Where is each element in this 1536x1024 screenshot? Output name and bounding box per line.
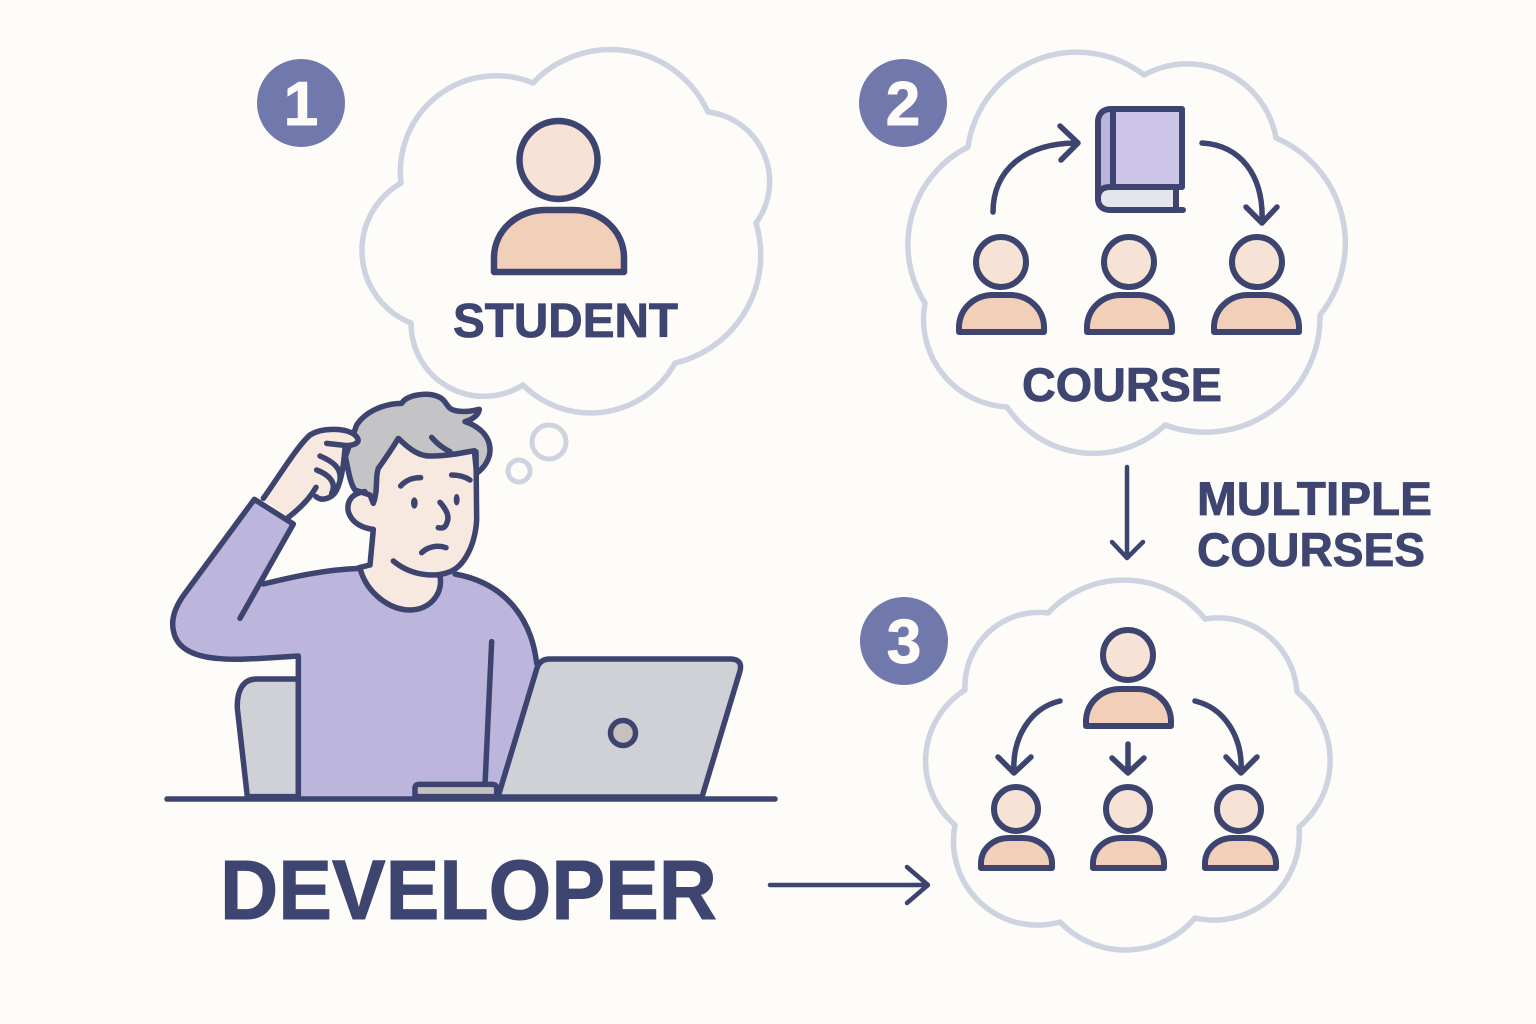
cloud outline: multiple courses	[926, 580, 1330, 950]
label: multiple courses: COURSES	[1197, 523, 1425, 576]
badge: step 1	[257, 59, 345, 147]
person	[173, 394, 537, 797]
arrow: course down to multiple courses	[1112, 467, 1143, 558]
arrow: developer to courses	[770, 867, 928, 903]
badge: step 1: 1	[284, 70, 318, 139]
cloud outline: course	[908, 52, 1345, 453]
arrow: students to book	[993, 126, 1078, 212]
label: multiple courses	[1197, 472, 1432, 576]
badge: step 2	[859, 59, 947, 147]
laptop	[498, 659, 741, 797]
tablet on desk	[415, 784, 497, 797]
hand	[263, 429, 358, 517]
brows, nose, mouth	[401, 475, 470, 553]
icon: small thought bubbles	[508, 425, 566, 482]
ear	[348, 492, 373, 568]
arrows: distribution to three people	[998, 701, 1257, 773]
sweater outline	[173, 499, 537, 797]
badge: step 3	[860, 597, 948, 685]
cloud outline: student	[362, 50, 770, 413]
label: course: COURSE	[1022, 358, 1222, 411]
chair	[237, 679, 298, 797]
desk line	[167, 796, 775, 802]
illustration: confused developer at laptop	[167, 394, 775, 799]
icon: book	[1098, 109, 1183, 210]
label: developer: DEVELOPER	[220, 843, 717, 937]
jaw	[393, 452, 477, 575]
panel: multiple courses thought cloud	[926, 580, 1330, 950]
sweater	[173, 499, 537, 797]
icon: three people	[981, 787, 1276, 868]
icon: three students	[959, 237, 1299, 332]
panel: student thought cloud	[362, 50, 770, 413]
panel: course thought cloud	[908, 52, 1345, 453]
arrow: book to students	[1202, 143, 1277, 223]
skin: face and neck	[348, 438, 477, 608]
badge: step 2: 2	[886, 70, 920, 139]
label: student: STUDENT	[453, 295, 678, 348]
icon: teacher person	[1086, 630, 1171, 726]
icon: student person	[494, 121, 624, 272]
eyes	[412, 498, 417, 508]
hair	[345, 394, 490, 503]
label: multiple courses: MULTIPLE	[1197, 472, 1432, 525]
badge: step 3: 3	[887, 608, 921, 677]
